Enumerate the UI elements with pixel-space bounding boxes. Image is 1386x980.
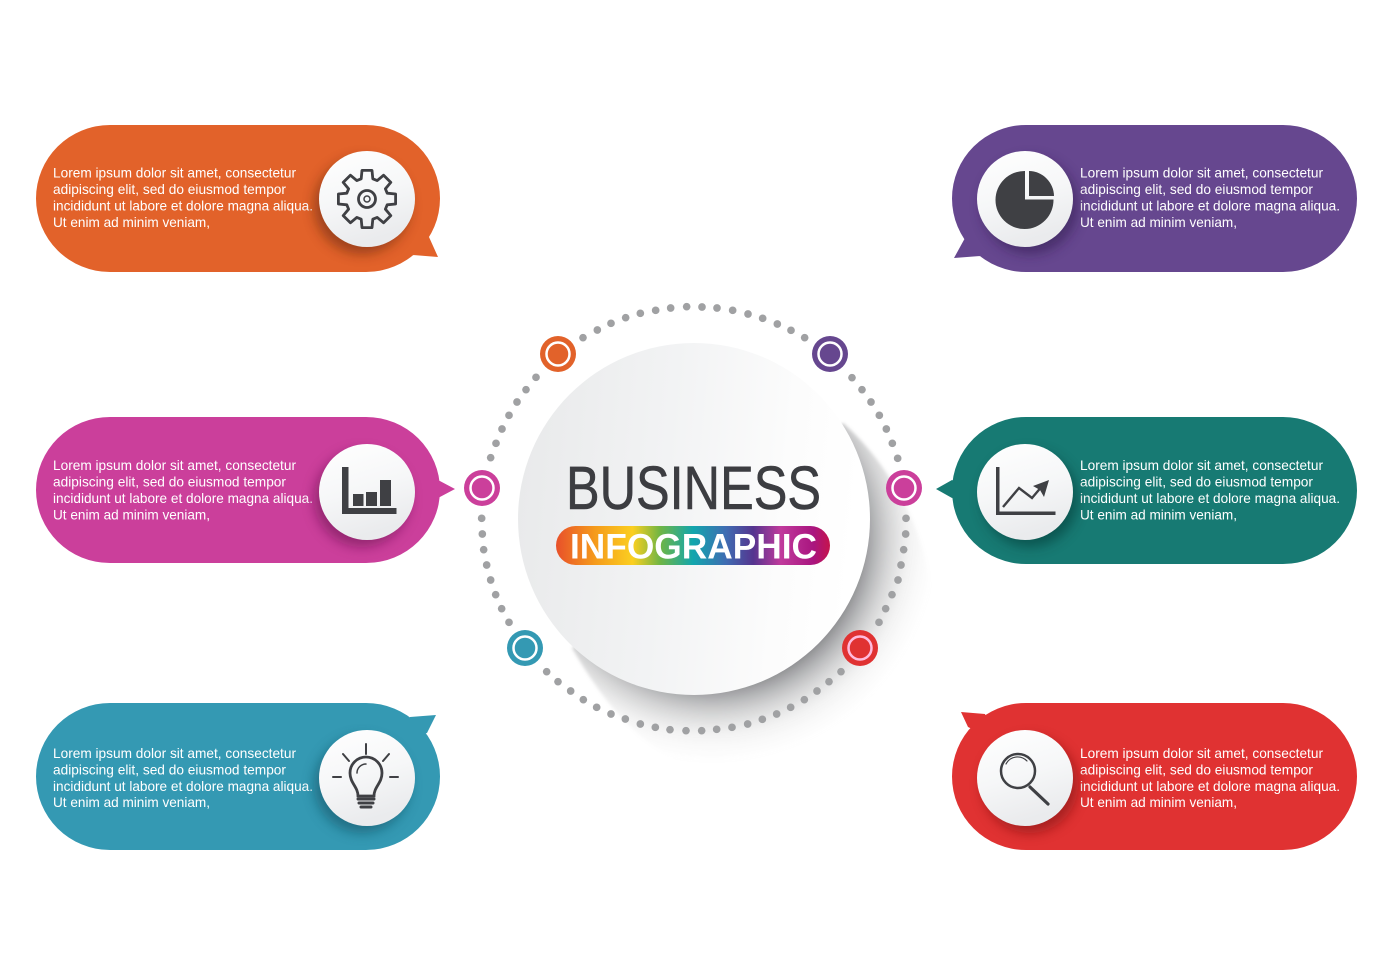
green card text: adipiscing elit, sed do eiusmod tempor <box>1080 474 1313 490</box>
green card text: Lorem ipsum dolor sit amet, consectetur <box>1080 457 1323 473</box>
green card text <box>1080 457 1340 522</box>
red card text: Ut enim ad minim veniam, <box>1080 794 1237 810</box>
panel: green growth chart card <box>936 417 1357 564</box>
purple card text: incididunt ut labore et dolore magna aliqua. <box>1080 198 1340 214</box>
red card text <box>1080 745 1340 810</box>
gear icon button <box>314 151 415 254</box>
red card text: incididunt ut labore et dolore magna aliqua. <box>1080 778 1340 794</box>
magenta card text: incididunt ut labore et dolore magna aliqua. <box>53 490 313 506</box>
purple card text: Ut enim ad minim veniam, <box>1080 214 1237 230</box>
orange bubble <box>36 125 440 272</box>
blue card text: incididunt ut labore et dolore magna aliqua. <box>53 778 313 794</box>
INFOGRAPHIC badge <box>556 526 830 566</box>
red bubble <box>952 703 1357 850</box>
rainbow pill <box>556 526 830 565</box>
ring node: red <box>842 630 878 666</box>
magenta card text: Ut enim ad minim veniam, <box>53 506 210 522</box>
ring node: magenta left <box>464 470 500 506</box>
magenta card text <box>53 457 313 522</box>
magenta bubble <box>36 417 455 563</box>
blue card text: Lorem ipsum dolor sit amet, consectetur <box>53 745 296 761</box>
light bulb icon button <box>314 730 415 833</box>
magnifier icon button <box>977 730 1078 833</box>
red card text: adipiscing elit, sed do eiusmod tempor <box>1080 762 1313 778</box>
panel: orange gear card <box>36 125 440 272</box>
purple bubble <box>952 125 1357 272</box>
panel: magenta bar chart card <box>36 417 455 563</box>
green bubble <box>936 417 1357 564</box>
magenta card text: adipiscing elit, sed do eiusmod tempor <box>53 474 286 490</box>
panel: purple pie chart card <box>952 125 1357 272</box>
orange card text: incididunt ut labore et dolore magna aliqua. <box>53 198 313 214</box>
growth chart icon button <box>977 444 1078 547</box>
panel: blue light bulb card <box>36 703 440 850</box>
green card text: incididunt ut labore et dolore magna aliqua. <box>1080 490 1340 506</box>
badge label: INFOGRAPHIC <box>570 528 817 566</box>
ring node: orange <box>540 336 576 372</box>
magenta card text: Lorem ipsum dolor sit amet, consectetur <box>53 457 296 473</box>
purple card text: adipiscing elit, sed do eiusmod tempor <box>1080 181 1313 197</box>
ring node: magenta right <box>886 470 922 506</box>
purple card text <box>1080 164 1340 230</box>
bar chart icon button <box>314 444 415 547</box>
blue bubble <box>36 703 440 850</box>
purple card text: Lorem ipsum dolor sit amet, consectetur <box>1080 164 1323 180</box>
center hub shadow <box>572 423 930 770</box>
orange card text <box>53 164 313 230</box>
red card text: Lorem ipsum dolor sit amet, consectetur <box>1080 745 1323 761</box>
orange card text: Lorem ipsum dolor sit amet, consectetur <box>53 164 296 180</box>
blue card text: adipiscing elit, sed do eiusmod tempor <box>53 762 286 778</box>
ring node: purple <box>812 336 848 372</box>
heading: BUSINESS: BUSINESS <box>566 454 821 522</box>
ring node: blue <box>507 630 543 666</box>
center hub disc <box>518 343 870 695</box>
panel: red magnifier card <box>952 703 1357 850</box>
green card text: Ut enim ad minim veniam, <box>1080 506 1237 522</box>
pie chart icon button <box>977 151 1078 254</box>
orange card text: Ut enim ad minim veniam, <box>53 214 210 230</box>
blue card text: Ut enim ad minim veniam, <box>53 794 210 810</box>
orange card text: adipiscing elit, sed do eiusmod tempor <box>53 181 286 197</box>
dotted ring <box>478 303 910 734</box>
blue card text <box>53 745 313 810</box>
